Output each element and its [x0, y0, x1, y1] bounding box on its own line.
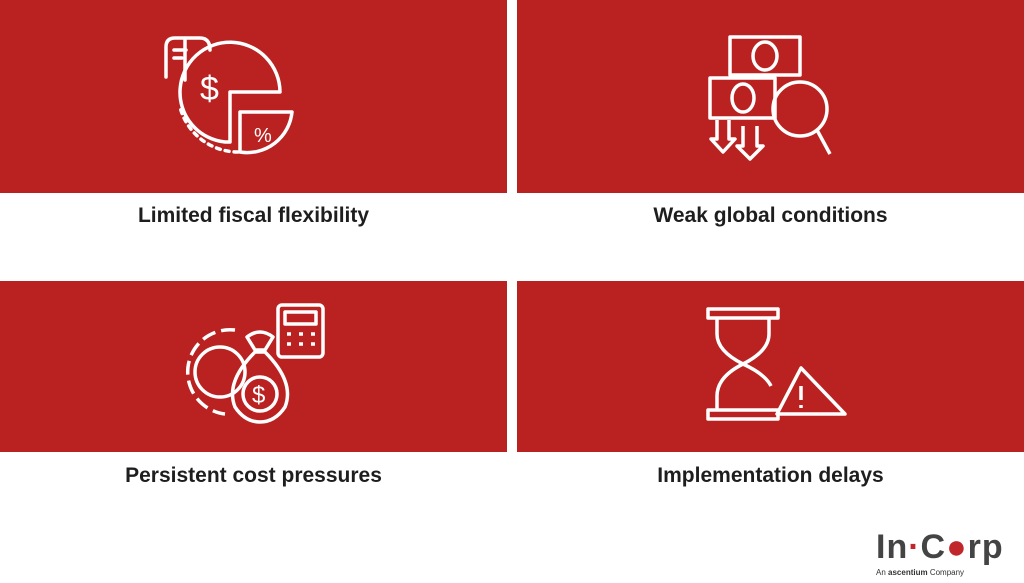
icon: hourglass warning: [706, 307, 847, 421]
label: delays: Implementation delays: [657, 464, 884, 487]
panel: delays: [517, 281, 1024, 452]
icon: cost gear and money bag: [186, 303, 325, 424]
label: fiscal: Limited fiscal flexibility: [138, 204, 369, 227]
icon: fiscal pie: [164, 36, 294, 154]
icon: global currency: [708, 35, 832, 161]
label: cost: Persistent cost pressures: [125, 464, 382, 487]
logo: In·C●rp: [876, 528, 1004, 566]
panel: cost: [0, 281, 507, 452]
panel: fiscal: [0, 0, 507, 193]
panel: global: [517, 0, 1024, 193]
logo: An ascentium Company: [876, 568, 964, 577]
icon: fiscal pie: $: [200, 70, 219, 108]
label: global: Weak global conditions: [653, 204, 888, 227]
icon: cost gear and money bag: $: [252, 382, 265, 409]
icon: fiscal pie: %: [254, 125, 272, 147]
